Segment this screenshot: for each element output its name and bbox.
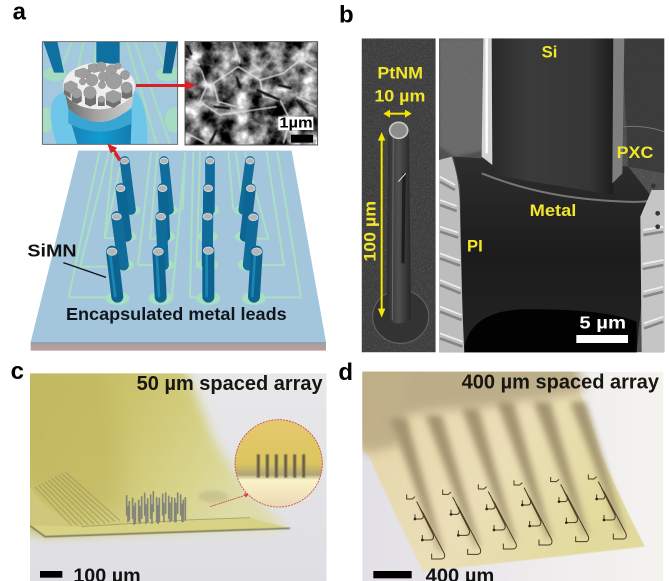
label encapsulated metal leads: Encapsulated metal leads	[66, 304, 287, 324]
label 100 µm: 100 µm	[361, 201, 380, 262]
magnified circle inset	[235, 420, 322, 507]
label c: c	[11, 358, 24, 385]
substrate board	[31, 151, 326, 351]
label PXC: PXC	[617, 143, 653, 162]
scale bar 100 µm	[40, 566, 141, 581]
label d: d	[338, 359, 353, 386]
scale bar 400 µm	[373, 566, 494, 581]
SEM image: platinum needle	[362, 38, 436, 352]
scale label 5 µm: 5 µm	[579, 313, 626, 333]
SEM image: cross section	[439, 38, 664, 352]
inset: SEM surface image	[185, 42, 318, 145]
arrow: width dimension	[383, 110, 412, 118]
label b: b	[339, 2, 354, 29]
label Si: Si	[542, 42, 557, 61]
panel b: SEM images	[339, 2, 664, 352]
label SiMN with pointer	[27, 241, 106, 277]
heading: 50 µm spaced array	[137, 373, 323, 395]
label 10 µm: 10 µm	[374, 87, 425, 106]
photo	[362, 372, 663, 581]
arrow: needle to inset	[107, 144, 121, 161]
arrow: length dimension	[378, 132, 385, 318]
inset: magnified needle tip schematic	[36, 42, 185, 144]
microneedle pillars	[105, 158, 266, 305]
label PtNM: PtNM	[377, 64, 423, 83]
panel c: 50 µm spaced array photo	[7, 348, 327, 581]
arrow: tip to SEM	[136, 81, 196, 90]
encapsulated metal leads	[69, 152, 301, 297]
label SiMN with pointer: SiMN	[27, 241, 77, 261]
panel a: SiMN array schematic	[13, 0, 326, 351]
photo	[30, 373, 326, 581]
heading: 400 µm spaced array	[462, 371, 659, 393]
panel d: 400 µm spaced array photo	[338, 355, 663, 581]
label Metal: Metal	[530, 201, 576, 220]
label PI: PI	[467, 237, 483, 256]
scale label 1 µm: 1µm	[279, 116, 313, 132]
